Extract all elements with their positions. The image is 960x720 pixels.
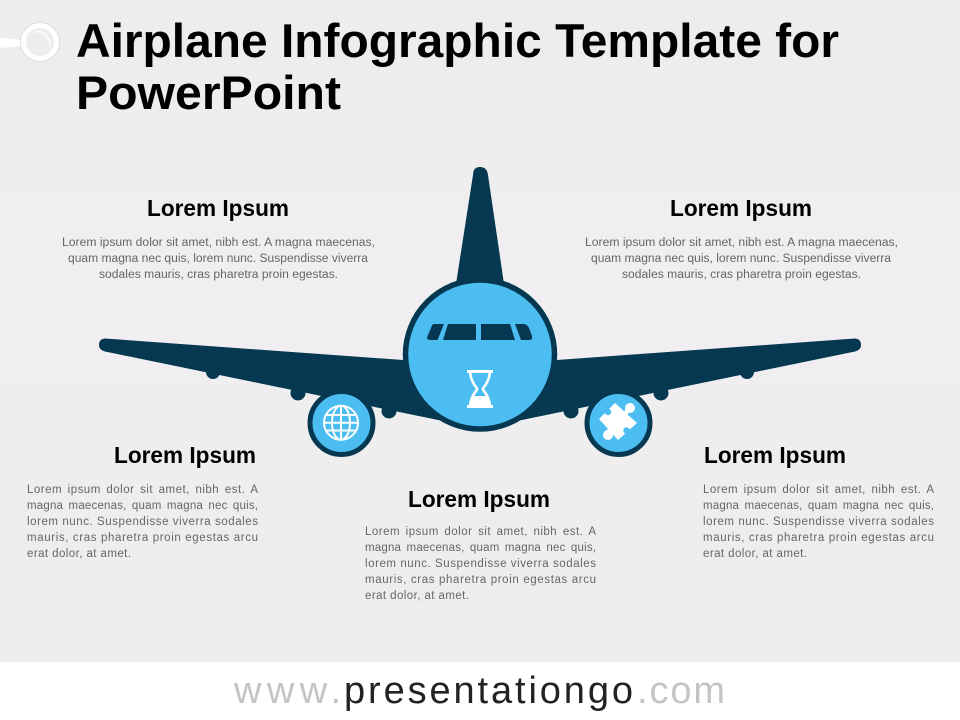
body text: Lorem ipsum dolor sit amet, nibh est. A magna maecenas, bbox=[62, 237, 375, 249]
body text: lorem nunc. Suspendisse viverra sodales bbox=[703, 516, 934, 528]
body text: Lorem ipsum dolor sit amet, nibh est. A bbox=[365, 526, 596, 538]
body text: lorem nunc. Suspendisse viverra sodales bbox=[365, 558, 596, 570]
heading: Lorem Ipsum bbox=[114, 442, 256, 468]
body text: erat dolor, at amet. bbox=[703, 548, 807, 560]
panel: lower right text bbox=[703, 442, 934, 560]
body text: magna maecenas, quam magna nec quis, bbox=[703, 500, 934, 512]
panel: top right text bbox=[585, 195, 898, 281]
body text: Lorem ipsum dolor sit amet, nibh est. A bbox=[703, 484, 934, 496]
right engine with puzzle icon bbox=[587, 392, 650, 454]
body text: quam magna nec quis, lorem nunc. Suspendisse viverra bbox=[68, 253, 369, 265]
body text: quam magna nec quis, lorem nunc. Suspendisse viverra bbox=[591, 253, 892, 265]
left engine with globe icon bbox=[310, 392, 373, 454]
heading: Lorem Ipsum bbox=[670, 195, 812, 221]
airplane illustration bbox=[99, 167, 861, 454]
body text: Lorem ipsum dolor sit amet, nibh est. A magna maecenas, bbox=[585, 237, 898, 249]
icon: globe bbox=[324, 406, 358, 440]
heading: Lorem Ipsum bbox=[147, 195, 289, 221]
body text: erat dolor, at amet. bbox=[365, 590, 469, 602]
heading: Lorem Ipsum bbox=[704, 442, 846, 468]
body text: magna maecenas, quam magna nec quis, bbox=[365, 542, 596, 554]
footer website: presentationgo bbox=[344, 670, 633, 712]
body text bbox=[27, 484, 258, 560]
body text: lorem nunc. Suspendisse viverra sodales bbox=[27, 516, 258, 528]
wings bbox=[99, 338, 861, 431]
footer website bbox=[233, 670, 725, 712]
panel: lower center text bbox=[365, 486, 596, 602]
body text: mauris, cras pharetra proin egestas arcu bbox=[27, 532, 258, 544]
footer website: .com bbox=[637, 670, 725, 712]
footer website: www. bbox=[233, 670, 341, 712]
body text: erat dolor, at amet. bbox=[27, 548, 131, 560]
title: Airplane Infographic Template for bbox=[76, 14, 839, 67]
body text bbox=[62, 237, 375, 281]
body text: mauris, cras pharetra proin egestas arcu bbox=[365, 574, 596, 586]
body text: sodales mauris, cras pharetra proin egestas. bbox=[622, 269, 861, 281]
cockpit windows bbox=[427, 324, 532, 340]
icon: hourglass bbox=[467, 372, 493, 406]
body text: magna maecenas, quam magna nec quis, bbox=[27, 500, 258, 512]
panel: lower left text bbox=[27, 442, 258, 560]
fuselage bbox=[406, 280, 554, 429]
title: PowerPoint bbox=[76, 66, 341, 119]
body text: sodales mauris, cras pharetra proin egestas. bbox=[99, 269, 338, 281]
wing bumps bbox=[206, 365, 754, 418]
panel: top left text bbox=[62, 195, 375, 281]
body text bbox=[703, 484, 934, 560]
body text: Lorem ipsum dolor sit amet, nibh est. A bbox=[27, 484, 258, 496]
body text bbox=[365, 526, 596, 602]
tail fin bbox=[456, 167, 504, 284]
title bbox=[76, 14, 839, 119]
icon: title pin logo bbox=[0, 22, 60, 62]
body text bbox=[585, 237, 898, 281]
icon: puzzle piece bbox=[599, 403, 637, 440]
body text: mauris, cras pharetra proin egestas arcu bbox=[703, 532, 934, 544]
heading: Lorem Ipsum bbox=[408, 486, 550, 512]
